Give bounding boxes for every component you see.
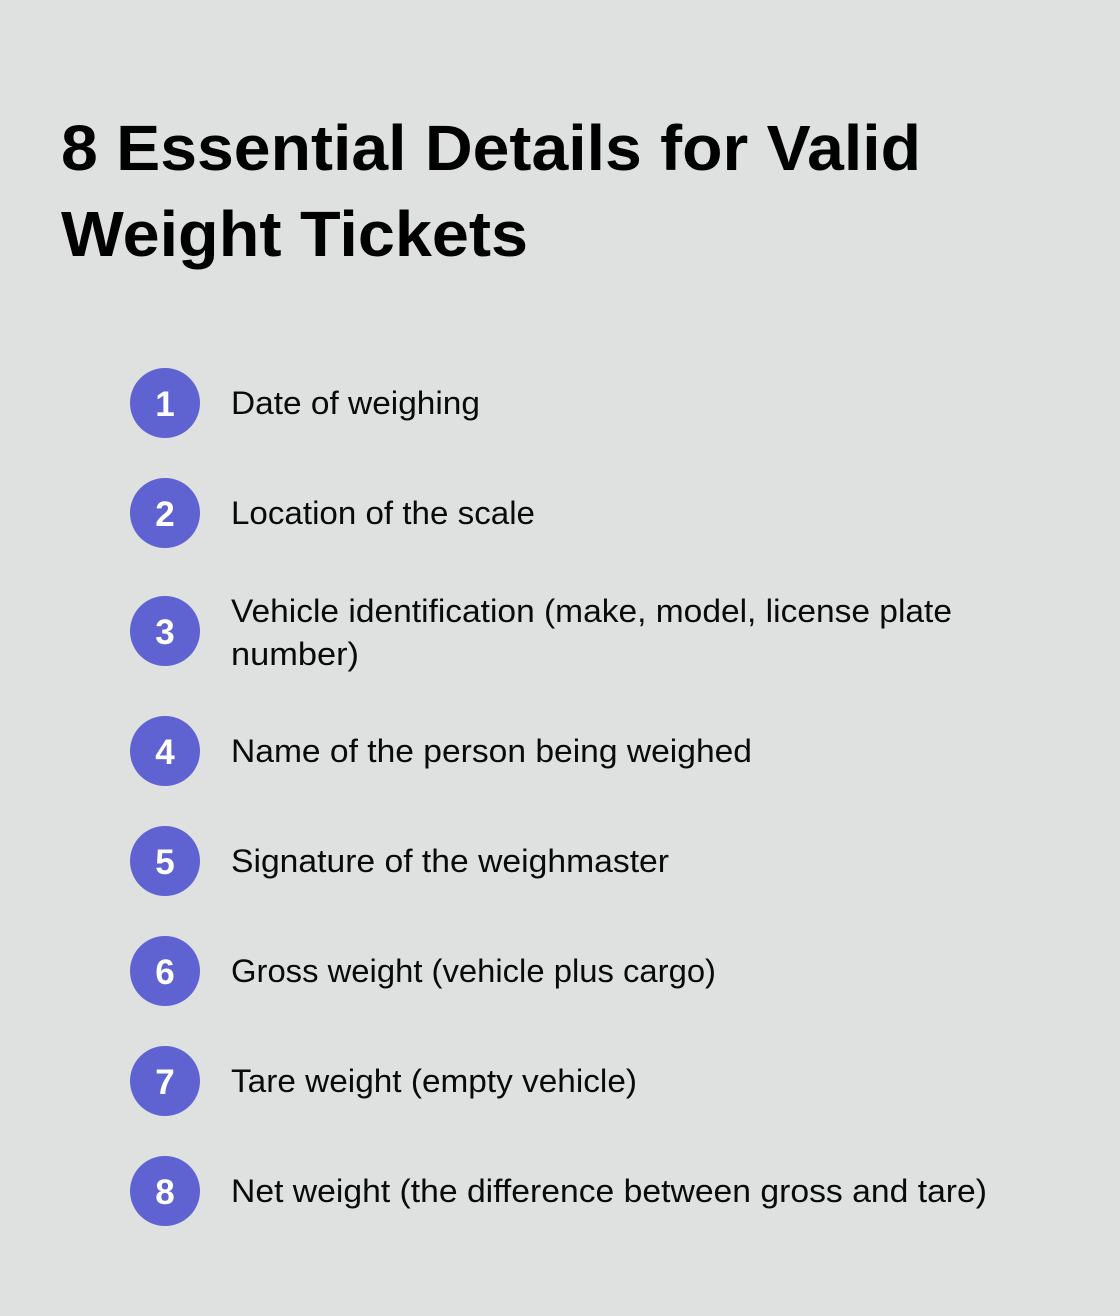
item 5: signature of the weighmaster: 5 bbox=[155, 843, 175, 882]
title bbox=[61, 112, 921, 270]
item 3: vehicle identification: Vehicle identification (make, model, license plate bbox=[231, 593, 952, 629]
item 1: date of weighing bbox=[130, 368, 480, 438]
title: 8 Essential Details for Valid bbox=[61, 112, 921, 184]
item 8: net weight bbox=[130, 1156, 987, 1226]
item 6: gross weight bbox=[130, 936, 716, 1006]
item 6: gross weight: 6 bbox=[155, 953, 175, 992]
item 4: name of the person bbox=[130, 716, 752, 786]
title: Weight Tickets bbox=[61, 198, 528, 270]
item 5: signature of the weighmaster: Signature of the weighmaster bbox=[231, 843, 669, 879]
item 3: vehicle identification: 3 bbox=[155, 613, 175, 652]
item 4: name of the person: Name of the person being weighed bbox=[231, 733, 752, 769]
item 3: vehicle identification bbox=[130, 593, 952, 672]
item 7: tare weight bbox=[130, 1046, 637, 1116]
item 8: net weight: 8 bbox=[155, 1173, 175, 1212]
list of eight details bbox=[130, 368, 987, 1226]
item 7: tare weight: 7 bbox=[155, 1063, 175, 1102]
item 3: vehicle identification: number) bbox=[231, 636, 359, 672]
item 1: date of weighing: 1 bbox=[155, 385, 175, 424]
item 8: net weight: Net weight (the difference between gross and tare) bbox=[231, 1173, 987, 1209]
item 2: location of the scale: 2 bbox=[155, 495, 175, 534]
item 4: name of the person: 4 bbox=[155, 733, 175, 772]
item 2: location of the scale: Location of the scale bbox=[231, 495, 535, 531]
item 2: location of the scale bbox=[130, 478, 535, 548]
item 7: tare weight: Tare weight (empty vehicle) bbox=[231, 1063, 637, 1099]
item 1: date of weighing: Date of weighing bbox=[231, 385, 480, 421]
item 6: gross weight: Gross weight (vehicle plus cargo) bbox=[231, 953, 716, 989]
item 5: signature of the weighmaster bbox=[130, 826, 669, 896]
